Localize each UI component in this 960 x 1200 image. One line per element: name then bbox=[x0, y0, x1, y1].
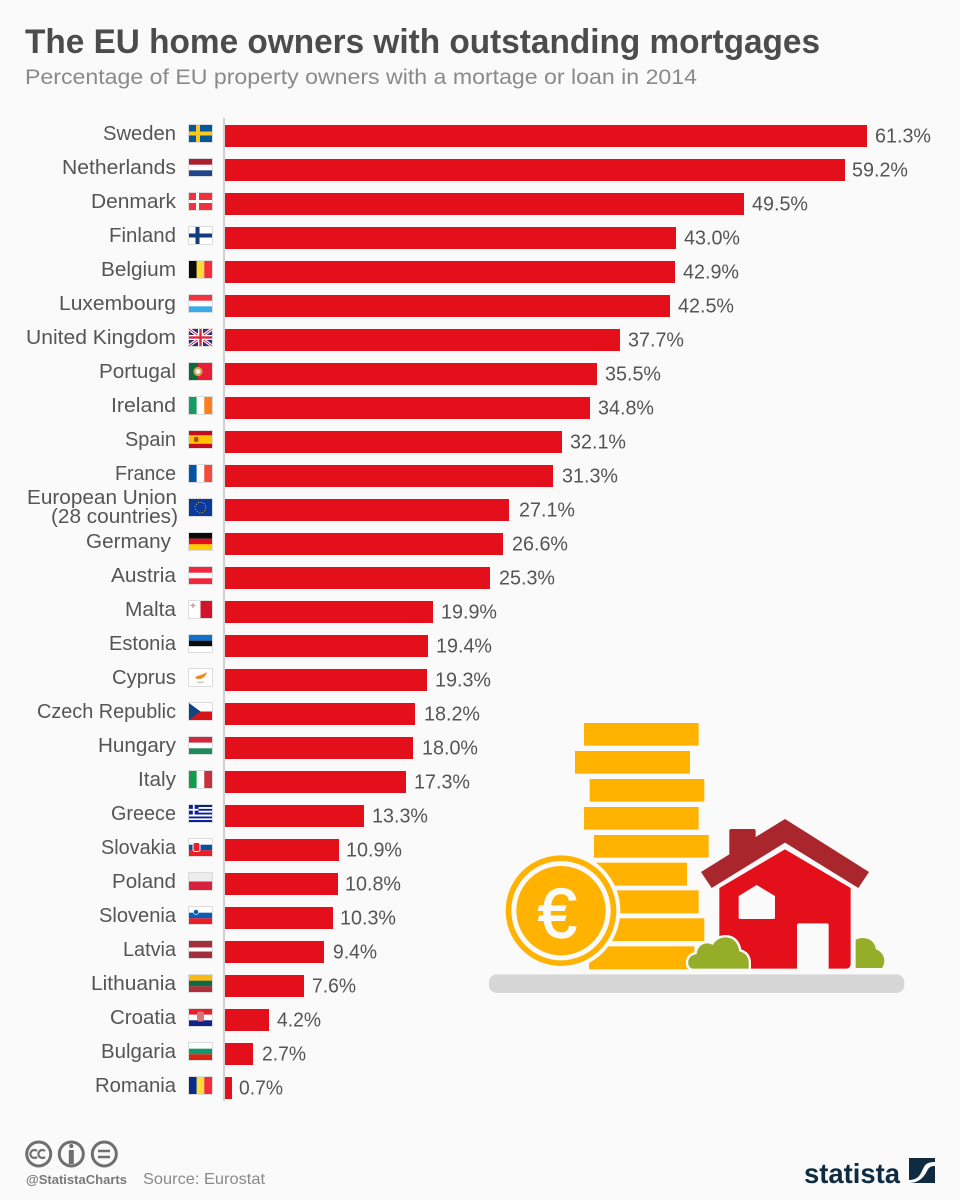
flag: Netherlands bbox=[188, 158, 213, 177]
label: Slovenia bbox=[99, 904, 177, 927]
flag: Slovenia bbox=[188, 906, 213, 925]
bar bbox=[225, 975, 304, 997]
value: 17.3% bbox=[414, 770, 470, 794]
bar bbox=[225, 669, 427, 691]
bar bbox=[225, 601, 433, 623]
value: 49.5% bbox=[752, 192, 808, 216]
label: Portugal bbox=[99, 360, 176, 383]
label: Lithuania bbox=[91, 972, 177, 995]
bar bbox=[225, 499, 509, 521]
value: 35.5% bbox=[605, 362, 661, 386]
label: Netherlands bbox=[62, 156, 176, 179]
row: Netherlands bbox=[62, 156, 908, 182]
flag: Estonia bbox=[188, 634, 213, 653]
bar bbox=[225, 227, 676, 249]
value: 27.1% bbox=[519, 498, 575, 522]
logo: statista: statista bbox=[804, 1158, 900, 1189]
bar bbox=[225, 941, 324, 963]
title: The EU home owners with outstanding mortgages bbox=[25, 23, 820, 61]
flag: Sweden bbox=[188, 124, 213, 143]
row: Cyprus bbox=[112, 666, 491, 692]
icon: house bbox=[701, 819, 869, 969]
icon: coin stack bbox=[575, 723, 709, 969]
bar bbox=[225, 839, 339, 861]
value: 10.8% bbox=[345, 872, 401, 896]
label: United Kingdom bbox=[26, 326, 176, 349]
flag: Portugal bbox=[188, 362, 213, 381]
bar bbox=[225, 703, 415, 725]
row: Belgium bbox=[101, 258, 739, 284]
label: Italy bbox=[138, 768, 177, 791]
row: Greece bbox=[111, 802, 428, 828]
value: 43.0% bbox=[684, 226, 740, 250]
value: 61.3% bbox=[875, 124, 931, 148]
label: Latvia bbox=[123, 938, 177, 961]
flag: Denmark bbox=[188, 192, 213, 211]
flag: Latvia bbox=[188, 940, 213, 959]
row: Luxembourg bbox=[59, 292, 734, 318]
footer: licence icons bbox=[27, 1142, 116, 1166]
label: Spain bbox=[125, 428, 176, 451]
bar bbox=[225, 907, 333, 929]
label: Greece bbox=[111, 802, 176, 825]
flag: Germany bbox=[188, 532, 213, 551]
bar bbox=[225, 397, 590, 419]
flag: Greece bbox=[188, 804, 213, 823]
flag: Romania bbox=[188, 1076, 213, 1095]
bar bbox=[225, 873, 338, 895]
bar bbox=[225, 1077, 232, 1099]
row: European Union bbox=[27, 486, 575, 528]
flag: Ireland bbox=[188, 396, 213, 415]
row: Denmark bbox=[91, 190, 808, 216]
row: Portugal bbox=[99, 360, 661, 386]
row: Lithuania bbox=[91, 972, 356, 998]
row: Poland bbox=[112, 870, 401, 896]
bar bbox=[225, 567, 490, 589]
flag: United Kingdom bbox=[188, 328, 213, 347]
bar bbox=[225, 193, 744, 215]
flag: France bbox=[188, 464, 213, 483]
value: 10.9% bbox=[346, 838, 402, 862]
bar bbox=[225, 635, 428, 657]
flag: Luxembourg bbox=[188, 294, 213, 313]
value: 32.1% bbox=[570, 430, 626, 454]
label: Finland bbox=[109, 224, 176, 247]
row: France bbox=[115, 462, 618, 488]
value: 18.0% bbox=[422, 736, 478, 760]
footer: source: Source: Eurostat bbox=[143, 1171, 266, 1188]
label bbox=[27, 486, 178, 528]
label: (28 countries) bbox=[51, 505, 178, 528]
row: Bulgaria bbox=[101, 1040, 306, 1066]
label: Sweden bbox=[103, 122, 176, 145]
label: Bulgaria bbox=[101, 1040, 177, 1063]
label: Croatia bbox=[110, 1006, 177, 1029]
value: 10.3% bbox=[340, 906, 396, 930]
row: Czech Republic bbox=[37, 700, 480, 726]
illustration: coins and house bbox=[489, 723, 904, 993]
value: 7.6% bbox=[312, 974, 356, 998]
row: Hungary bbox=[98, 734, 478, 760]
row: Croatia bbox=[110, 1006, 321, 1032]
bar bbox=[225, 431, 562, 453]
flag: Slovakia bbox=[188, 838, 213, 857]
row: United Kingdom bbox=[26, 326, 684, 352]
icon: euro coin: € bbox=[538, 874, 577, 952]
label: European Union bbox=[27, 486, 177, 509]
value: 26.6% bbox=[512, 532, 568, 556]
bar bbox=[225, 295, 670, 317]
value: 37.7% bbox=[628, 328, 684, 352]
label: Cyprus bbox=[112, 666, 176, 689]
flag: European Union bbox=[188, 498, 213, 517]
value: 13.3% bbox=[372, 804, 428, 828]
flag: Lithuania bbox=[188, 974, 213, 993]
flag: Croatia bbox=[188, 1008, 213, 1027]
value: 9.4% bbox=[333, 940, 377, 964]
flag: Poland bbox=[188, 872, 213, 891]
label: Ireland bbox=[111, 394, 176, 417]
bar bbox=[225, 533, 503, 555]
label: Luxembourg bbox=[59, 292, 176, 315]
subtitle: Percentage of EU property owners with a mortage or loan in 2014 bbox=[25, 66, 697, 89]
label: Poland bbox=[112, 870, 176, 893]
value: 19.4% bbox=[436, 634, 492, 658]
bar bbox=[225, 329, 620, 351]
row: Malta bbox=[125, 598, 497, 624]
flag: Austria bbox=[188, 566, 213, 585]
row: Italy bbox=[138, 768, 470, 794]
flag: Cyprus bbox=[188, 668, 213, 687]
icon: right bush bbox=[856, 938, 884, 968]
value: 18.2% bbox=[424, 702, 480, 726]
value: 19.9% bbox=[441, 600, 497, 624]
label: France bbox=[115, 462, 176, 485]
value: 59.2% bbox=[852, 158, 908, 182]
row: Finland bbox=[109, 224, 740, 250]
bar bbox=[225, 261, 675, 283]
ground bbox=[489, 974, 904, 993]
value: 31.3% bbox=[562, 464, 618, 488]
label: Estonia bbox=[109, 632, 177, 655]
bar bbox=[225, 1043, 253, 1065]
value: 0.7% bbox=[239, 1076, 283, 1100]
label: Austria bbox=[111, 564, 177, 587]
value: 25.3% bbox=[499, 566, 555, 590]
bar bbox=[225, 363, 597, 385]
icon: left bush bbox=[688, 937, 749, 969]
chart axis bbox=[223, 118, 225, 1101]
bar bbox=[225, 737, 413, 759]
bar chart bbox=[26, 122, 931, 1100]
value: 34.8% bbox=[598, 396, 654, 420]
flag: Italy bbox=[188, 770, 213, 789]
row: Slovakia bbox=[101, 836, 402, 862]
label: Slovakia bbox=[101, 836, 177, 859]
label: Romania bbox=[95, 1074, 177, 1097]
value: 42.9% bbox=[683, 260, 739, 284]
flag: Finland bbox=[188, 226, 213, 245]
label: Belgium bbox=[101, 258, 176, 281]
flag: Spain bbox=[188, 430, 213, 449]
row: Spain bbox=[125, 428, 626, 454]
flag: Belgium bbox=[188, 260, 213, 279]
flag: Hungary bbox=[188, 736, 213, 755]
bar bbox=[225, 1009, 269, 1031]
row: Latvia bbox=[123, 938, 377, 964]
bar bbox=[225, 125, 867, 147]
value: 4.2% bbox=[277, 1008, 321, 1032]
value: 42.5% bbox=[678, 294, 734, 318]
bar bbox=[225, 805, 364, 827]
flag: Malta bbox=[188, 600, 213, 619]
icon: euro coin bbox=[502, 851, 620, 970]
value: 2.7% bbox=[262, 1042, 306, 1066]
row: Estonia bbox=[109, 632, 492, 658]
bar bbox=[225, 159, 845, 181]
label: Malta bbox=[125, 598, 177, 621]
label: Czech Republic bbox=[37, 700, 176, 723]
flag: Czech Republic bbox=[188, 702, 213, 721]
label: Germany bbox=[86, 530, 172, 553]
value: 19.3% bbox=[435, 668, 491, 692]
row: Slovenia bbox=[99, 904, 396, 930]
row: Sweden bbox=[103, 122, 931, 148]
row: Romania bbox=[95, 1074, 283, 1100]
label: Hungary bbox=[98, 734, 177, 757]
flag: Bulgaria bbox=[188, 1042, 213, 1061]
bar bbox=[225, 771, 406, 793]
footer: handle: @StatistaCharts bbox=[26, 1172, 127, 1187]
row: Ireland bbox=[111, 394, 654, 420]
bar bbox=[225, 465, 553, 487]
label: Denmark bbox=[91, 190, 177, 213]
row: Germany bbox=[86, 530, 568, 556]
row: Austria bbox=[111, 564, 555, 590]
